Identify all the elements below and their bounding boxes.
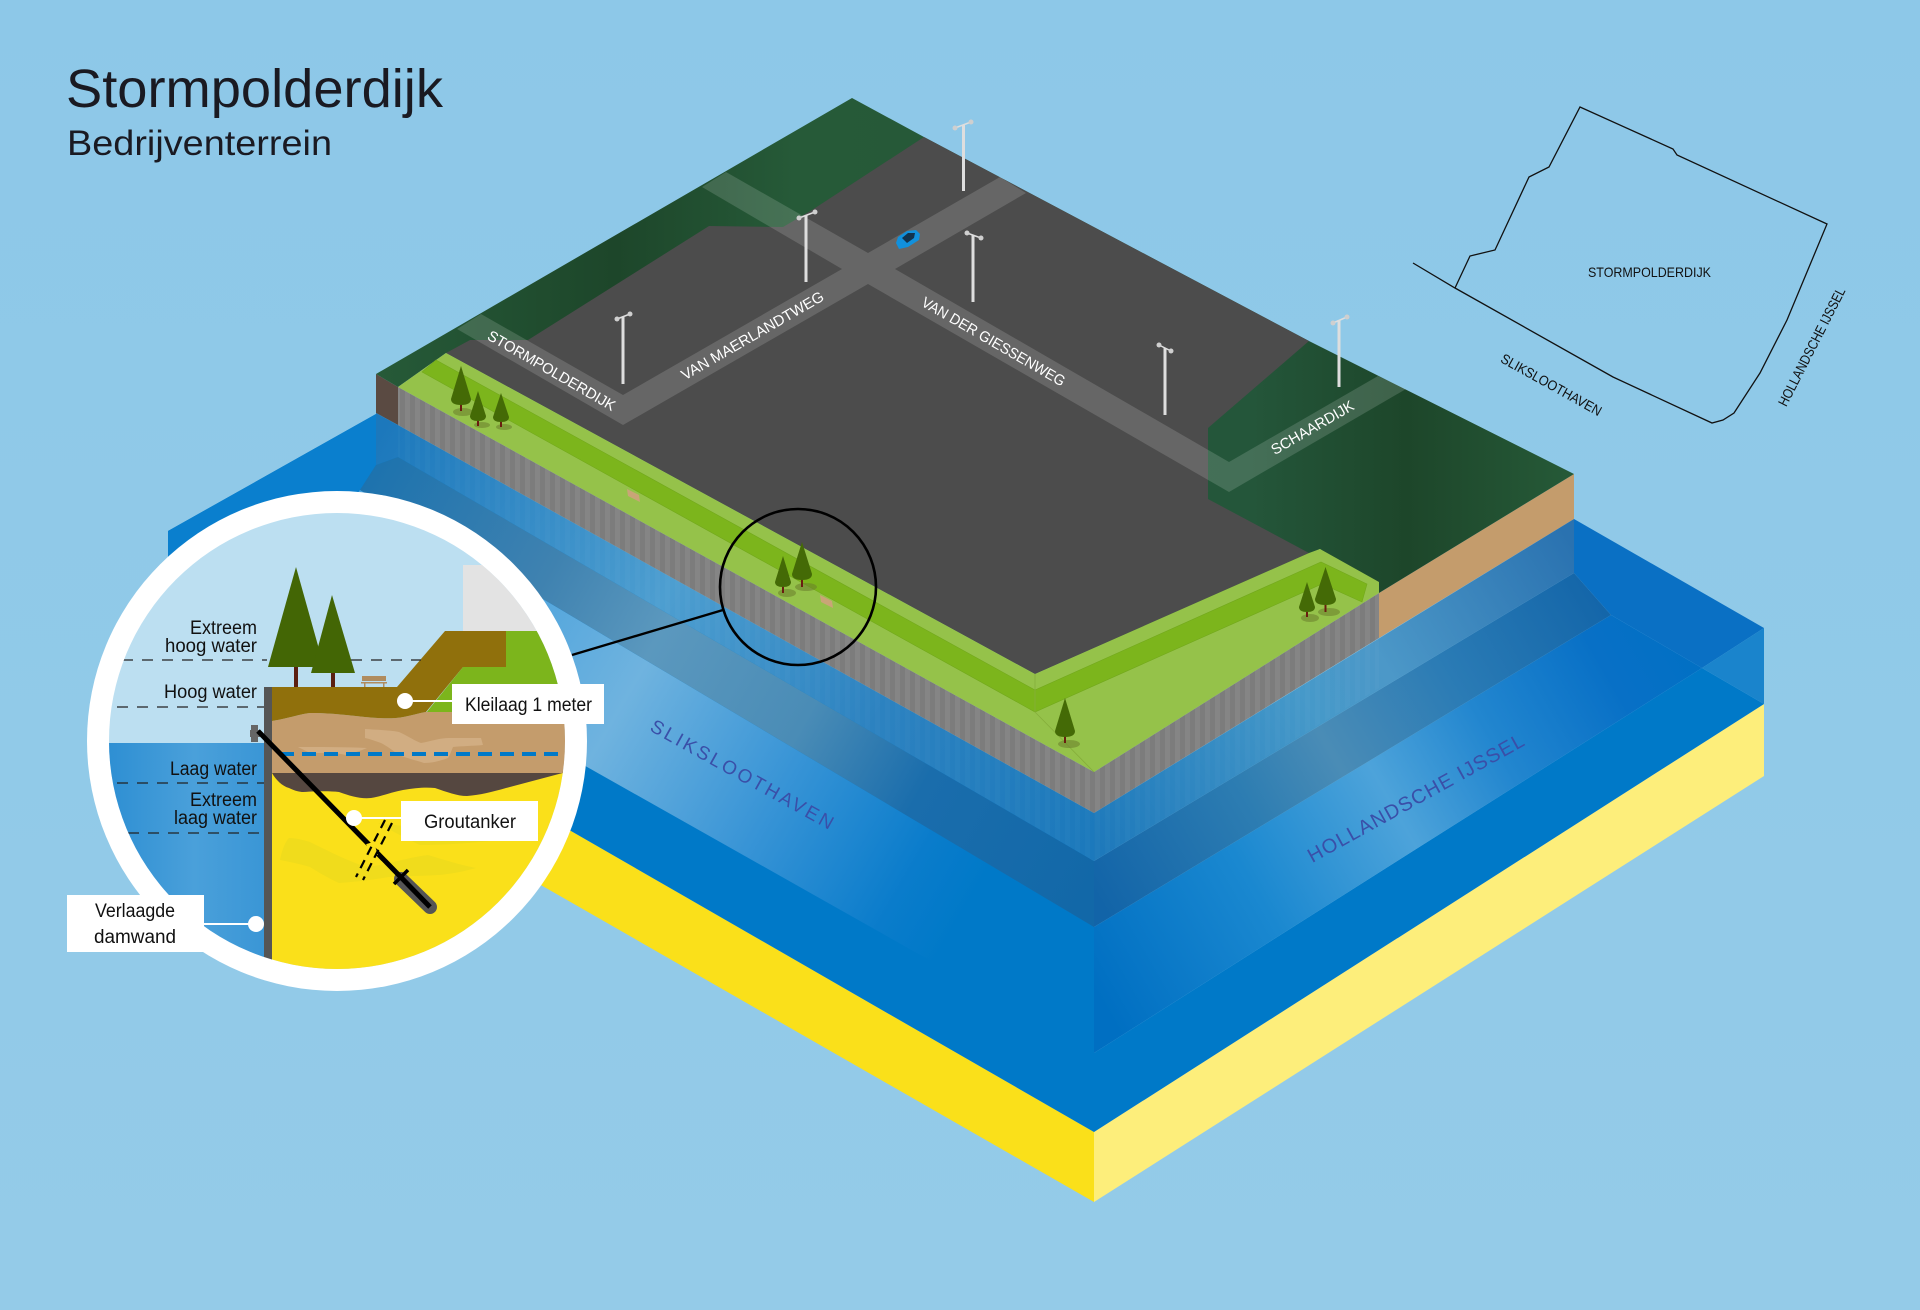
label: Extreem laag water: laag water — [174, 808, 258, 829]
dike grass in section — [426, 631, 558, 712]
callout: Verlaagde damwand: damwand — [94, 927, 176, 948]
location map inset — [1413, 107, 1848, 423]
road name: Schaardijk: SCHAARDIJK — [1268, 397, 1357, 459]
title: Bedrijventerrein — [67, 124, 332, 163]
title — [66, 59, 444, 163]
label: Extreem hoog water — [165, 618, 258, 657]
sheet pile in section — [264, 687, 272, 977]
tan soil side of the land — [1379, 474, 1574, 638]
building — [463, 565, 536, 631]
dark soil side of the land — [376, 374, 398, 425]
car — [896, 230, 920, 249]
water label: Hollandsche IJssel: HOLLANDSCHE IJSSEL — [1304, 730, 1528, 868]
lit slope, Sliksloothaven — [300, 490, 1094, 1053]
lit slope, Hollandsche IJssel — [1094, 615, 1702, 1053]
level lines — [117, 660, 421, 833]
ground anchor — [250, 725, 430, 907]
submerged sheet pile, left — [376, 413, 1094, 861]
label: Extreem laag water: Extreem — [190, 790, 257, 811]
trees on the dike — [451, 366, 1340, 748]
water basin, far back wall — [168, 414, 376, 600]
water basin, far right wall — [1574, 519, 1764, 668]
label: Hoog water: Hoog water — [164, 682, 258, 703]
benches — [627, 489, 833, 608]
label: Laag water: Laag water — [170, 759, 258, 780]
location map inset: STORMPOLDERDIJK — [1588, 264, 1712, 280]
water label: Sliksloothaven: SLIKSLOOTHAVEN — [646, 716, 837, 834]
water basin, right end face — [1702, 628, 1764, 704]
water basin, left bed — [168, 414, 1094, 1132]
dike: dark green stripe — [422, 360, 1367, 712]
street lamps — [614, 120, 1350, 415]
section bench — [361, 676, 387, 687]
darker sand patches — [280, 824, 486, 883]
tan soil layer — [272, 712, 580, 773]
cross-section circle — [87, 491, 600, 991]
peat layer — [272, 771, 570, 798]
light soil inclusions — [298, 729, 483, 763]
sand base, right face — [1094, 704, 1764, 1202]
road name: Van Maerlandtweg: VAN MAERLANDTWEG — [678, 288, 827, 384]
yellow sand layer — [272, 770, 564, 969]
clay layer — [272, 631, 506, 721]
dike: corner creases — [1035, 674, 1094, 772]
label: Extreem hoog water: hoog water — [165, 636, 258, 657]
callout: Kleilaag 1 meter — [397, 684, 604, 724]
callout: Verlaagde damwand — [67, 895, 264, 952]
title: Stormpolderdijk — [66, 59, 444, 119]
location map inset: HOLLANDSCHE IJSSEL — [1775, 285, 1848, 409]
section trees — [268, 567, 355, 687]
location map inset: SLIKSLOOTHAVEN — [1498, 350, 1605, 419]
label: Extreem laag water — [174, 790, 258, 829]
callout: Groutanker — [346, 801, 538, 841]
magnifier ring on the dike — [720, 509, 876, 665]
road name: Stormpolderdijk: STORMPOLDERDIJK — [484, 327, 618, 415]
submerged band, right — [1094, 519, 1574, 861]
groundwater line — [280, 752, 565, 756]
land top: grass — [376, 98, 1574, 674]
label: Extreem hoog water: Extreem — [190, 618, 257, 639]
callout: Kleilaag 1 meter: Kleilaag 1 meter — [465, 695, 593, 716]
magnifier connector — [572, 610, 723, 655]
dark slope, Hollandsche IJssel — [1094, 573, 1611, 927]
dark slope, Sliksloothaven — [360, 457, 1094, 927]
sand base, left face — [300, 675, 1094, 1202]
callout: Groutanker: Groutanker — [424, 812, 517, 833]
land top: asphalt terrain — [446, 137, 1309, 674]
road name: Van der Giessenweg: VAN DER GIESSENWEG — [918, 294, 1068, 390]
water basin, right bed — [1094, 668, 1764, 1132]
dike: light green top — [398, 353, 1379, 772]
harbour water — [109, 743, 264, 957]
sheet pile wall — [398, 387, 1379, 813]
callout: Verlaagde damwand: Verlaagde — [95, 901, 175, 922]
roads — [457, 172, 1406, 492]
